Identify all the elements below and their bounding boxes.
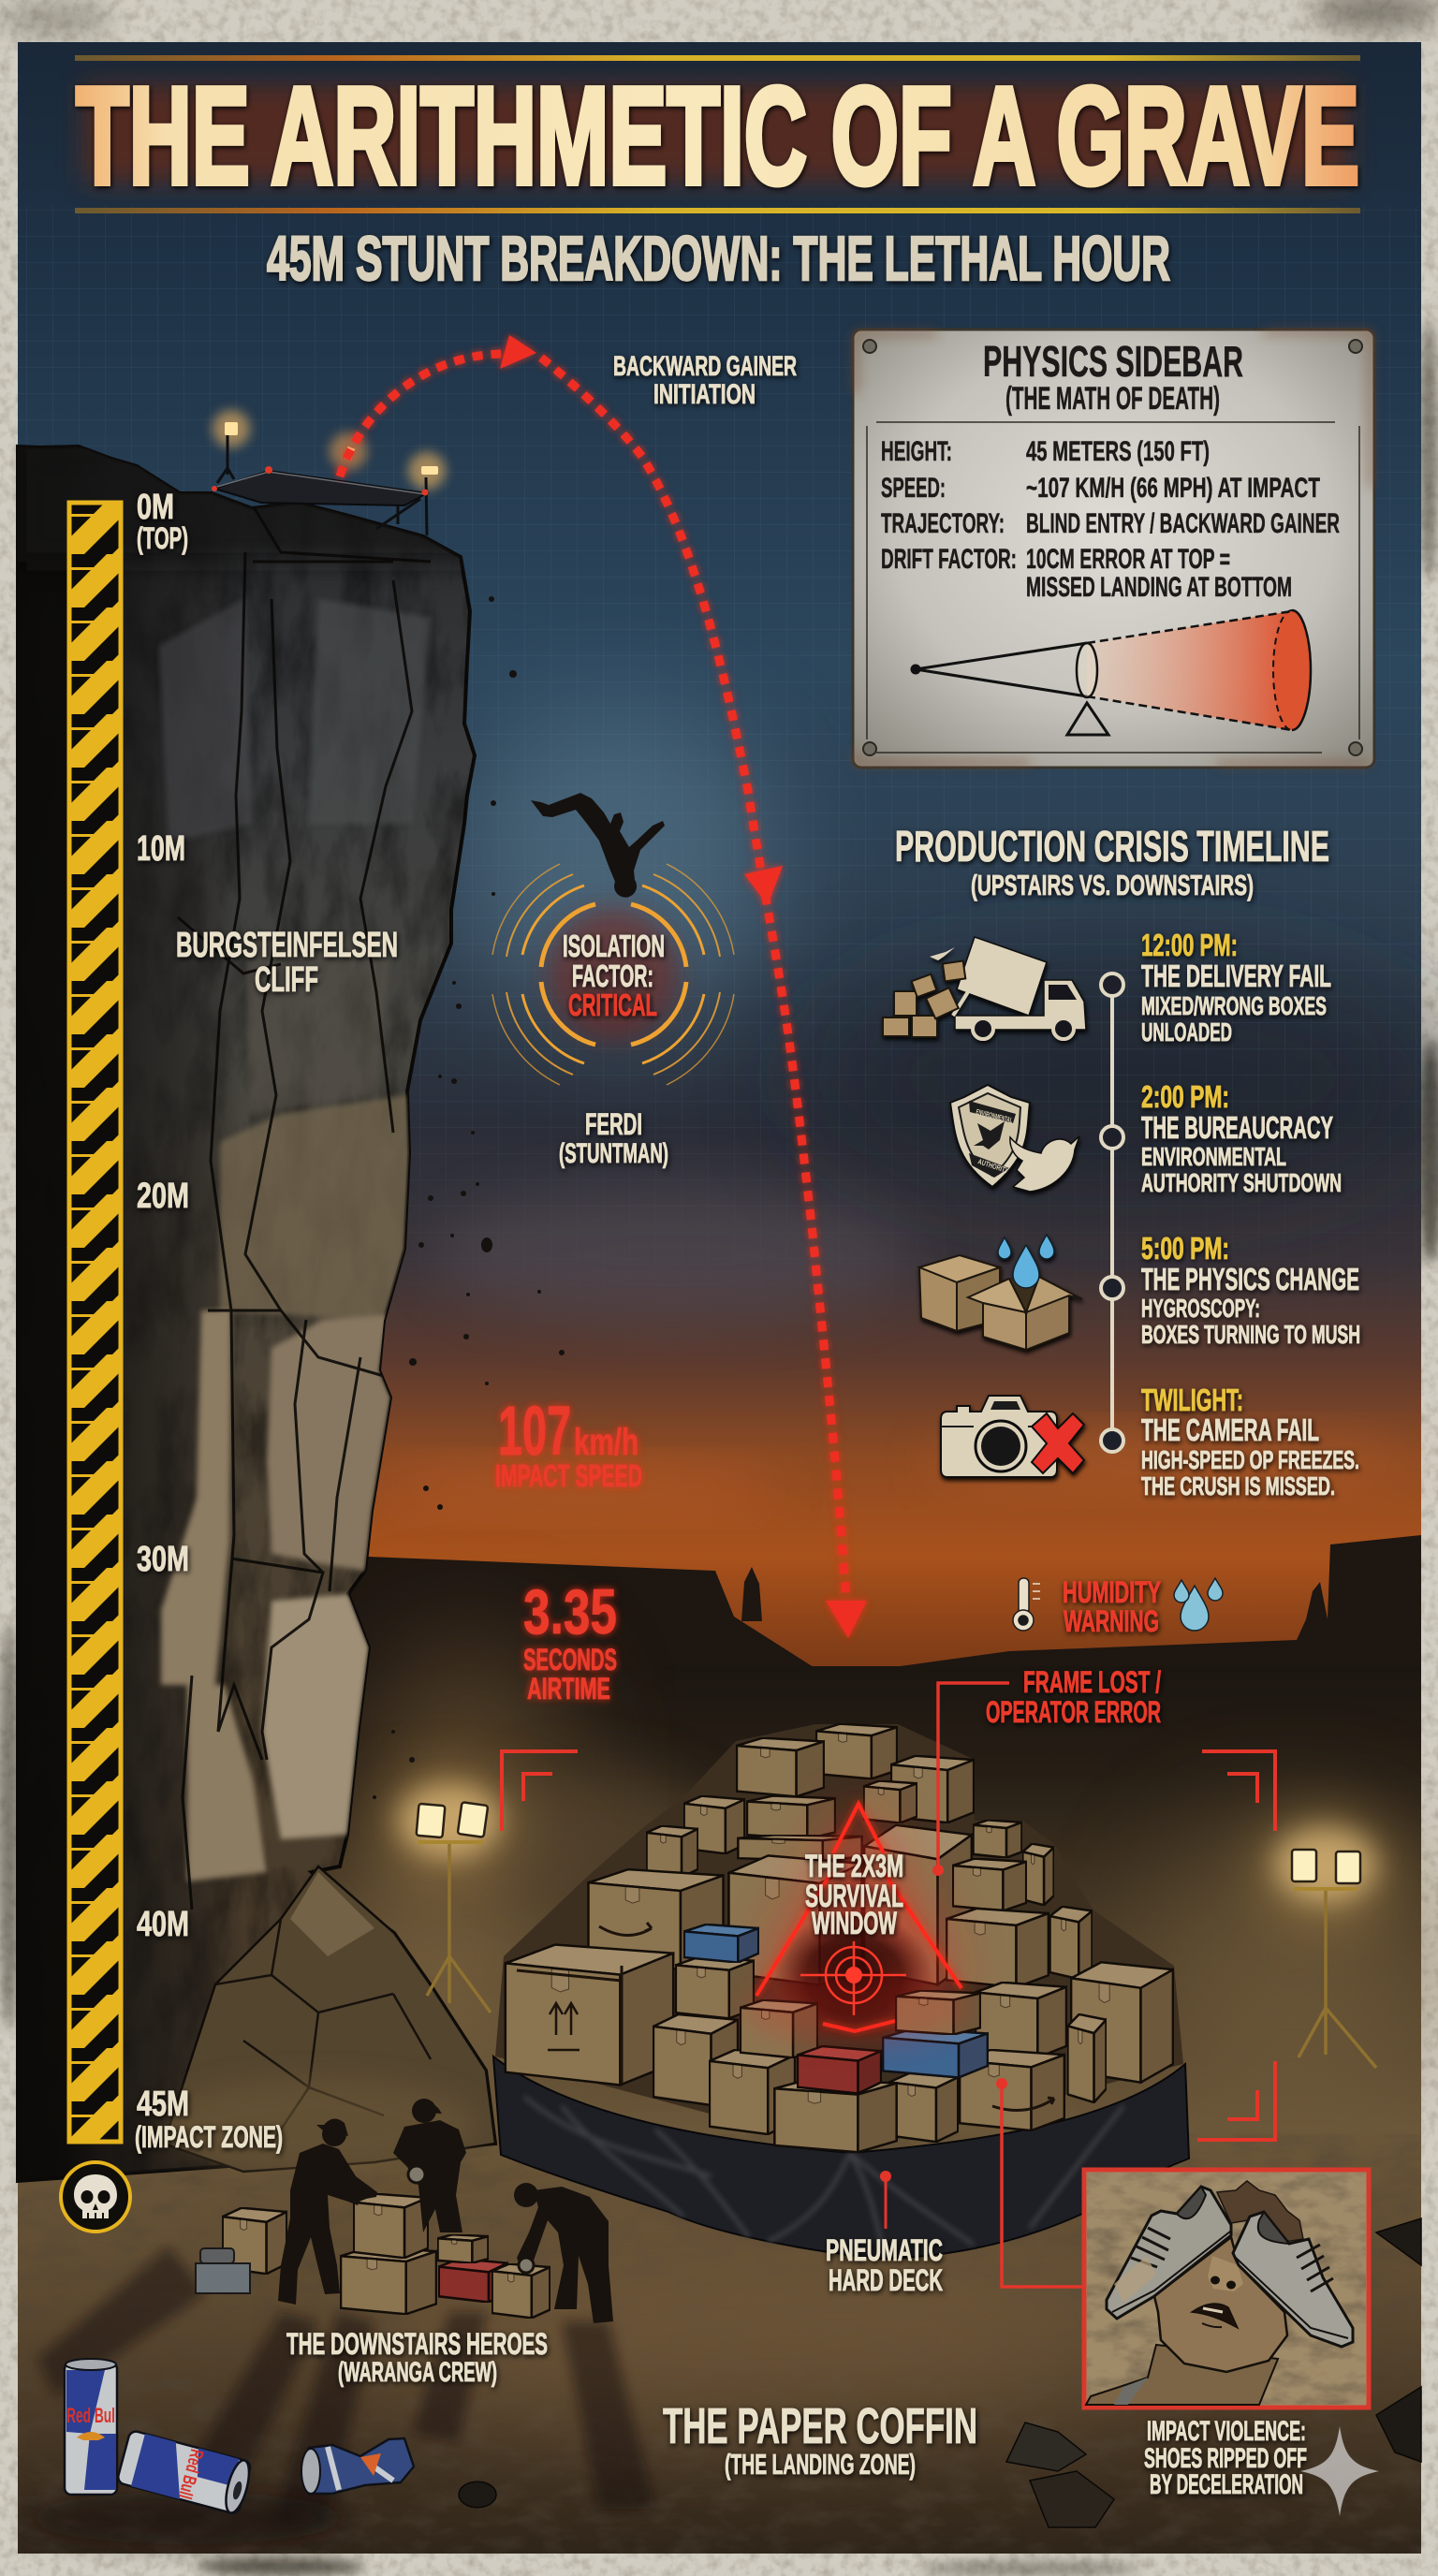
icon: soggy boxes with water drops <box>919 1235 1082 1350</box>
plate data rows: 45 METERS (150 FT) <box>1026 436 1210 467</box>
timeline entry: bureaucracy: ENVIRONMENTAL <box>1141 1142 1286 1171</box>
energy drink cans <box>65 2359 414 2515</box>
ruler labels: 20M <box>137 1177 189 1216</box>
rocks on ground <box>459 2218 1421 2527</box>
crew member middle <box>393 2099 466 2232</box>
callout: pneumatic hard deck: HARD DECK <box>829 2263 943 2297</box>
stat: impact speed: 107 <box>498 1392 571 1470</box>
cliff lit patches <box>159 599 431 1881</box>
icon: authority badge and bird: AUTHORITY <box>976 1157 1010 1176</box>
callout line to impact inset <box>996 2078 1084 2287</box>
plate heading <box>983 337 1243 417</box>
red survival window overlay <box>756 1804 961 2042</box>
callout: frame lost: FRAME LOST / <box>1023 1665 1161 1699</box>
timeline entry: bureaucracy: 2:00 PM: <box>1141 1079 1229 1114</box>
plate data rows <box>881 436 1340 603</box>
shoe right <box>1233 2212 1353 2347</box>
isolation factor text <box>563 929 665 1022</box>
timeline entry: delivery: UNLOADED <box>1141 1017 1232 1046</box>
survival window text: WINDOW <box>812 1906 898 1941</box>
plate heading: (THE MATH OF DEATH) <box>1005 381 1220 417</box>
sky backdrop <box>18 42 1438 1671</box>
humidity warning: WARNING <box>1064 1604 1159 1638</box>
landing zone label: (THE LANDING ZONE) <box>725 2448 916 2481</box>
hazard height ruler <box>69 503 121 2142</box>
plate screws <box>863 340 1362 755</box>
timeline entry: camera fail: TWILIGHT: <box>1141 1383 1243 1417</box>
impact inset caption: BY DECELERATION <box>1150 2469 1303 2500</box>
isolation factor text: CRITICAL <box>568 988 657 1022</box>
plate data rows: MISSED LANDING AT BOTTOM <box>1026 572 1292 603</box>
humidity warning <box>1013 1575 1223 1638</box>
icon: delivery truck <box>883 937 1086 1039</box>
callout: pneumatic hard deck: PNEUMATIC <box>826 2233 943 2267</box>
title rules <box>75 55 1360 213</box>
neck and shoulder <box>1086 2345 1278 2405</box>
icon: authority badge and bird: ENVIRONMENTAL <box>976 1107 1014 1125</box>
timeline entry: delivery: MIXED/WRONG BOXES <box>1141 991 1327 1020</box>
crew label <box>286 2327 548 2388</box>
isolation factor text: FACTOR: <box>572 959 653 993</box>
stuntman silhouette <box>531 793 665 898</box>
timeline entry: physics change <box>1141 1231 1360 1349</box>
jump trajectory arrow <box>340 335 867 1638</box>
icon: authority badge and bird <box>950 1085 1079 1192</box>
ruler labels: 40M <box>137 1905 189 1944</box>
callout: frame lost: OPERATOR ERROR <box>986 1695 1161 1729</box>
crew boxes <box>196 2194 550 2318</box>
survival window text <box>805 1849 903 1941</box>
upright can: Red Bul <box>66 2404 115 2427</box>
stat: airtime <box>523 1576 617 1705</box>
survival window text: SURVIVAL <box>805 1879 903 1914</box>
plate data rows: 10CM ERROR AT TOP = <box>1026 544 1230 575</box>
fallen can <box>116 2430 254 2515</box>
ruler labels <box>135 488 283 2154</box>
plate data rows: DRIFT FACTOR: <box>881 544 1017 575</box>
impact inset caption <box>1144 2416 1307 2500</box>
cliff label: BURGSTEINFELSEN <box>176 926 398 965</box>
timeline entry: delivery: THE DELIVERY FAIL <box>1141 959 1331 993</box>
timeline entry: delivery <box>1141 928 1331 1046</box>
face <box>1154 2237 1287 2372</box>
icon: camera with red cross <box>941 1396 1084 1477</box>
physics sidebar plate <box>853 329 1374 768</box>
ruler labels: 0M <box>137 488 174 527</box>
stuntman label: FERDI <box>585 1107 642 1141</box>
distant mesas <box>346 1535 1421 1778</box>
stat: airtime: SECONDS <box>523 1643 617 1676</box>
cliff <box>18 440 505 2181</box>
crew member left <box>278 2118 377 2305</box>
crew label: (WARANGA CREW) <box>338 2357 497 2388</box>
icon: thermometer <box>1013 1578 1040 1631</box>
plate data rows: HEIGHT: <box>881 436 952 467</box>
timeline entry: delivery: 12:00 PM: <box>1141 928 1238 962</box>
cliff label: CLIFF <box>255 960 318 1000</box>
shoe left <box>1107 2187 1231 2319</box>
stat: impact speed <box>495 1392 642 1493</box>
stat: airtime: AIRTIME <box>527 1672 610 1705</box>
jump platform with lights <box>212 410 446 535</box>
ruler labels: 45M <box>137 2085 189 2124</box>
plate data rows: TRAJECTORY: <box>881 508 1005 539</box>
ruler labels: (TOP) <box>137 521 188 555</box>
timeline entry: camera fail <box>1141 1383 1359 1500</box>
icon: humidity drops <box>1174 1578 1223 1631</box>
timeline entry: bureaucracy <box>1141 1079 1342 1197</box>
impact inset caption: IMPACT VIOLENCE: <box>1147 2416 1306 2447</box>
landing zone label <box>663 2398 977 2481</box>
trajectory label <box>613 351 797 410</box>
isolation factor text: ISOLATION <box>563 929 665 963</box>
timeline entry: physics change: HYGROSCOPY: <box>1141 1294 1260 1323</box>
isolation factor rings <box>492 864 734 1085</box>
ground <box>18 1638 1432 2554</box>
stuntman label <box>559 1107 668 1169</box>
viewfinder brackets <box>502 1751 1275 2140</box>
trajectory label: BACKWARD GAINER <box>613 351 797 382</box>
timeline spine <box>1101 973 1123 1452</box>
target reticle <box>800 1941 906 2015</box>
survival window text: THE 2X3M <box>805 1849 903 1884</box>
ruler labels: 30M <box>137 1540 189 1579</box>
crushed can <box>301 2438 414 2494</box>
callout: pneumatic hard deck <box>826 2171 943 2297</box>
landing pile of cardboard boxes <box>495 1724 1183 2152</box>
icon: skull badge <box>61 2162 130 2232</box>
timeline entry: physics change: 5:00 PM: <box>1141 1231 1229 1266</box>
debris pile at cliff base <box>164 1866 495 2172</box>
tarp: pneumatic hard deck <box>493 2056 1189 2259</box>
callout: frame lost <box>932 1665 1161 1876</box>
cliff label <box>176 926 398 1000</box>
inset: impact violence illustration <box>1084 2170 1369 2408</box>
crew member right <box>514 2183 613 2323</box>
cliff cracks <box>178 505 431 1910</box>
landing zone label: THE PAPER COFFIN <box>663 2398 977 2454</box>
crew label: THE DOWNSTAIRS HEROES <box>286 2327 548 2361</box>
impact inset caption: SHOES RIPPED OFF <box>1144 2443 1307 2474</box>
sparkle watermark <box>1300 2426 1379 2516</box>
stuntman label: (STUNTMAN) <box>559 1138 668 1169</box>
timeline entry: camera fail: THE CAMERA FAIL <box>1141 1412 1319 1447</box>
stat: airtime: 3.35 <box>523 1576 617 1647</box>
fallen can: Red Bull <box>174 2447 207 2501</box>
hair <box>1217 2181 1303 2242</box>
timeline entry: camera fail: THE CRUSH IS MISSED. <box>1141 1471 1335 1500</box>
plate heading: PHYSICS SIDEBAR <box>983 337 1243 386</box>
humidity warning: HUMIDITY <box>1063 1575 1161 1609</box>
crate detail and amazon smiles <box>517 1923 1054 2110</box>
ruler labels: 10M <box>137 829 185 869</box>
downstairs crew silhouettes <box>278 2099 613 2323</box>
upright can <box>65 2359 117 2495</box>
timeline heading <box>895 822 1329 901</box>
stat: impact speed: IMPACT SPEED <box>495 1458 642 1493</box>
plate data rows: SPEED: <box>881 473 946 504</box>
flying rock debris <box>373 596 565 1799</box>
floodlight left <box>398 1783 501 2012</box>
stat: impact speed: km/h <box>574 1422 638 1463</box>
drift cone diagram <box>910 610 1311 735</box>
ruler labels: (IMPACT ZONE) <box>135 2120 283 2154</box>
floodlight right <box>1274 1827 1377 2068</box>
trajectory label: INITIATION <box>653 379 756 410</box>
timeline heading: (UPSTAIRS VS. DOWNSTAIRS) <box>971 869 1254 901</box>
